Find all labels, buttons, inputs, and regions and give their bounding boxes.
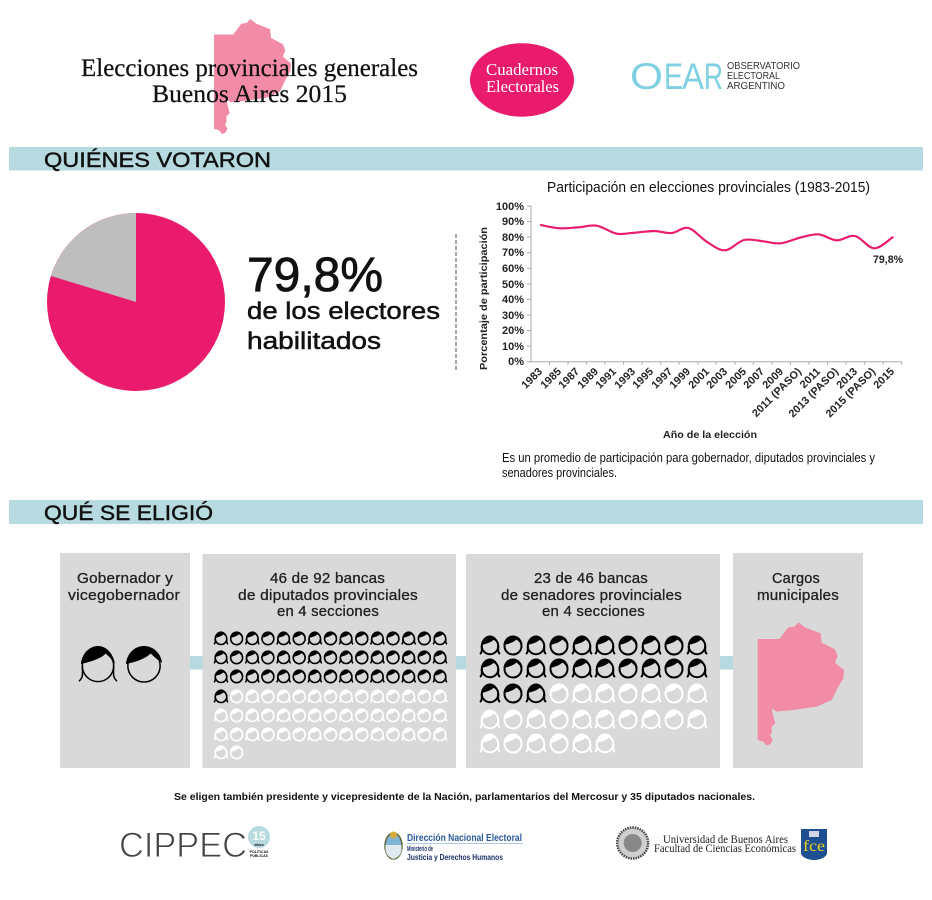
line chart: participation: 2011 <box>798 366 823 391</box>
logo: Dirección Nacional Electoral: Ministerio de <box>407 846 433 853</box>
pie chart <box>47 213 225 391</box>
chart note: Es un promedio de participación para gobernador, diputados provinciales y <box>502 451 876 465</box>
panel: diputados: en 4 secciones <box>277 604 379 620</box>
line chart: participation: 2005 <box>723 366 749 391</box>
panel: gobernador: vicegobernador <box>68 588 180 604</box>
logo: Universidad de Buenos Aires: fce <box>803 838 825 855</box>
panel: cargos municipales: municipales <box>757 588 839 604</box>
line chart: participation: 2009 <box>760 366 786 391</box>
line chart: participation: 2011 (PASO) <box>750 365 804 420</box>
line chart: participation <box>478 201 903 441</box>
logo: OEAR: O <box>630 56 663 97</box>
title <box>81 55 418 108</box>
line chart: participation: 90% <box>502 216 524 228</box>
big stat: 79,8% de los electores habilitados: habilitados <box>247 328 381 355</box>
logo: CIPPEC: POLÍTICAS <box>250 849 269 854</box>
line chart: participation: 30% <box>502 310 524 322</box>
panel: gobernador: Gobernador y <box>77 571 174 587</box>
line chart: participation: 1993 <box>612 366 638 391</box>
title: Elecciones provinciales generales <box>81 55 418 82</box>
line chart: participation: 2001 <box>686 366 712 391</box>
panel: senadores: de senadores provinciales <box>501 588 682 604</box>
line chart: participation: 1989 <box>575 366 601 391</box>
chart note: senadores provinciales. <box>502 466 617 480</box>
line chart: participation: 1983 <box>519 366 545 391</box>
panel: senadores: 23 de 46 bancas <box>534 571 648 587</box>
logo: Universidad de Buenos Aires: Facultad de Ciencias Económicas <box>654 843 796 855</box>
line chart: participation: 0% <box>508 356 524 368</box>
line chart: participation: 80% <box>502 232 524 244</box>
panel: cargos municipales <box>733 553 863 768</box>
heading: Qué se eligió <box>9 500 923 525</box>
line chart: participation: 1991 <box>593 366 619 391</box>
logo: OEAR: E <box>664 56 683 97</box>
footnote: Se eligen también presidente y vicepresidente de la Nación, parlamentarios del Mercosur y 35 diputados nacionales. <box>174 792 755 803</box>
logo: OEAR: R <box>704 56 723 97</box>
heading: Quiénes votaron <box>9 147 923 172</box>
line chart: participation: Año de la elección <box>663 429 757 441</box>
logo: OEAR: ELECTORAL <box>727 71 780 82</box>
logo: Dirección Nacional Electoral: Justicia y Derechos Humanos <box>407 852 503 862</box>
line chart: participation: 40% <box>502 294 524 306</box>
line chart: participation: 100% <box>496 201 524 213</box>
header map of Buenos Aires <box>214 19 291 134</box>
badge: Cuadernos Electorales <box>470 43 574 117</box>
line chart: participation: 50% <box>502 279 524 291</box>
logo: Dirección Nacional Electoral <box>385 832 523 862</box>
badge: Cuadernos Electorales: Electorales <box>486 77 559 96</box>
panel: diputados <box>202 554 456 768</box>
line chart: participation: 2007 <box>741 366 767 391</box>
line chart: participation: 1985 <box>538 366 564 391</box>
line chart: participation: 2003 <box>704 366 730 391</box>
line chart: participation: 1987 <box>556 366 582 391</box>
logo: CIPPEC: CIPPEC <box>119 826 247 865</box>
panel: diputados: 46 de 92 bancas <box>270 571 385 587</box>
logo: Universidad de Buenos Aires <box>617 828 827 860</box>
line chart: participation: 10% <box>502 341 524 353</box>
logo: OEAR: OBSERVATORIO <box>727 61 800 72</box>
line chart: participation: 2015 <box>871 366 897 391</box>
line chart: participation: 2015 (PASO) <box>824 365 878 420</box>
panel: cargos municipales: Cargos <box>772 571 820 587</box>
logo: OEAR: A <box>682 56 704 97</box>
line chart title: Participación en elecciones provinciales (1983-2015) <box>547 180 870 196</box>
panel: gobernador <box>60 553 190 768</box>
panel: senadores <box>466 554 720 768</box>
line chart: participation: 20% <box>502 325 524 337</box>
line chart: participation: 2013 <box>834 366 860 391</box>
panel: senadores: en 4 secciones <box>542 604 645 620</box>
panel: diputados: de diputados provinciales <box>238 588 418 604</box>
line chart: participation: Porcentaje de participación <box>478 227 490 370</box>
line chart: participation: 60% <box>502 263 524 275</box>
logo: OEAR <box>630 56 800 97</box>
big stat: 79,8% de los electores habilitados: 79,8% <box>247 249 383 302</box>
line chart: participation: 1999 <box>667 366 693 391</box>
big stat: 79,8% de los electores habilitados <box>247 249 440 355</box>
heading: Quiénes votaron: QUIÉNES VOTARON <box>44 149 271 172</box>
line chart: participation: 70% <box>502 247 524 259</box>
heading: Qué se eligió: QUÉ SE ELIGIÓ <box>44 502 213 525</box>
title: Buenos Aires 2015 <box>152 81 347 108</box>
line chart: participation: 1995 <box>630 366 656 391</box>
big stat: 79,8% de los electores habilitados: de los electores <box>247 298 440 325</box>
logo: CIPPEC: 15 <box>252 829 266 843</box>
logo: CIPPEC: años <box>254 842 264 847</box>
logo: Universidad de Buenos Aires: Universidad de Buenos Aires <box>663 834 788 846</box>
logo: Dirección Nacional Electoral: Dirección Nacional Electoral <box>407 833 522 844</box>
badge: Cuadernos Electorales: Cuadernos <box>486 60 558 79</box>
chart note <box>502 451 876 480</box>
line chart: participation: 79,8% <box>873 254 903 266</box>
logo: CIPPEC: PÚBLICAS <box>250 853 269 858</box>
logo: OEAR: ARGENTINO <box>727 81 785 92</box>
line chart: participation: 1997 <box>649 366 675 391</box>
line chart: participation: 2013 (PASO) <box>787 365 841 420</box>
